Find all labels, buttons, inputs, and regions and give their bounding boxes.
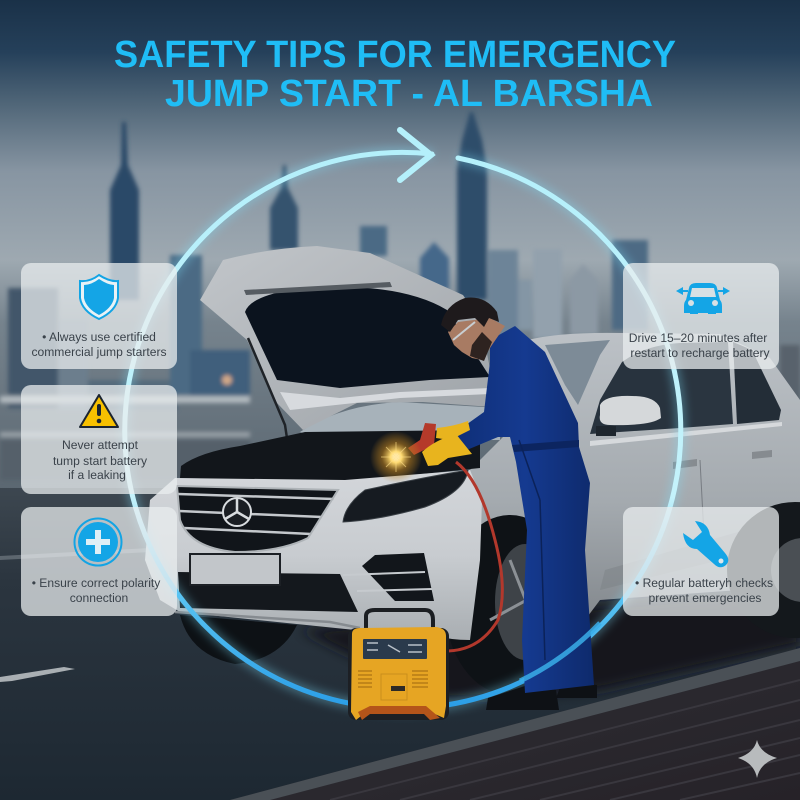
icon: plus in circle (74, 518, 122, 566)
mechanic: overalls (456, 326, 594, 693)
background: asphalt road (0, 488, 800, 800)
icon: warning triangle (80, 395, 118, 427)
text: tip 2: Never attempt (62, 438, 139, 452)
title: SAFETY TIPS FOR EMERGENCY (114, 34, 676, 76)
text: tip 5: • Regular batteryh checks (635, 576, 773, 590)
car: engine bay (180, 430, 480, 482)
text: tip 5: prevent emergencies (649, 591, 761, 605)
jump cable clamp (408, 423, 436, 455)
icon: shield (80, 275, 118, 319)
car: star logo (223, 498, 251, 526)
background: car shadow on road (300, 590, 800, 700)
text: tip 3: • Ensure correct polarity (32, 576, 161, 590)
glowing ring with arrow (125, 130, 681, 708)
text: tip 4 (629, 331, 771, 360)
icon: car with arrows (676, 283, 730, 314)
mechanic in blue overalls (441, 298, 597, 710)
car: open hood (200, 246, 492, 445)
car: license plate (190, 554, 280, 585)
panel: tip regular battery checks (623, 507, 779, 616)
ring segment passing in front of the mechanic's legs (520, 623, 600, 681)
panel: tip leaking battery (21, 385, 177, 494)
background: brick sidewalk and curb (230, 648, 800, 800)
portable jump starter unit (348, 610, 449, 720)
text: tip 5 (635, 576, 773, 605)
car: grille (177, 486, 338, 552)
text: tip 1 (31, 330, 167, 359)
car: headlight (343, 470, 468, 522)
icon: wrench (683, 521, 728, 567)
car: lower air intakes (175, 553, 434, 628)
title: JUMP START - AL BARSHA (165, 73, 653, 115)
panel: tip drive after restart (623, 263, 779, 369)
panel: tip correct polarity (21, 507, 177, 616)
spark (370, 431, 422, 483)
red jump cable (448, 462, 502, 651)
text: tip 1: commercial jump starters (31, 345, 167, 359)
text: tip 1: • Always use certified (42, 330, 156, 344)
text: tip 3: connection (70, 591, 128, 605)
car: front bumper and nose (145, 470, 482, 640)
mechanic: shoes (486, 682, 597, 710)
car: rear wheel (727, 502, 800, 638)
car: windshield (300, 402, 500, 440)
car: front right wheel (445, 515, 575, 695)
text: tip 4: Drive 15–20 minutes after (629, 331, 767, 345)
icon: sparkle watermark (738, 740, 777, 778)
car: front left tyre (180, 615, 297, 664)
text: tip 2: if a leaking (68, 468, 126, 482)
panel: tip certified jump starters (21, 263, 177, 369)
title (114, 34, 676, 115)
text: tip 2 (53, 438, 148, 482)
text: tip 4: restart to recharge battery (630, 346, 771, 360)
text: tip 3 (32, 576, 161, 605)
text: tip 2: tump start battery (53, 454, 148, 468)
mechanic: head with glasses (441, 298, 505, 361)
car: side body, roof and windows (450, 333, 800, 640)
mechanic: gloves (422, 421, 472, 466)
background: blurred city skyline (0, 112, 800, 480)
background: dusk sky (0, 0, 800, 520)
